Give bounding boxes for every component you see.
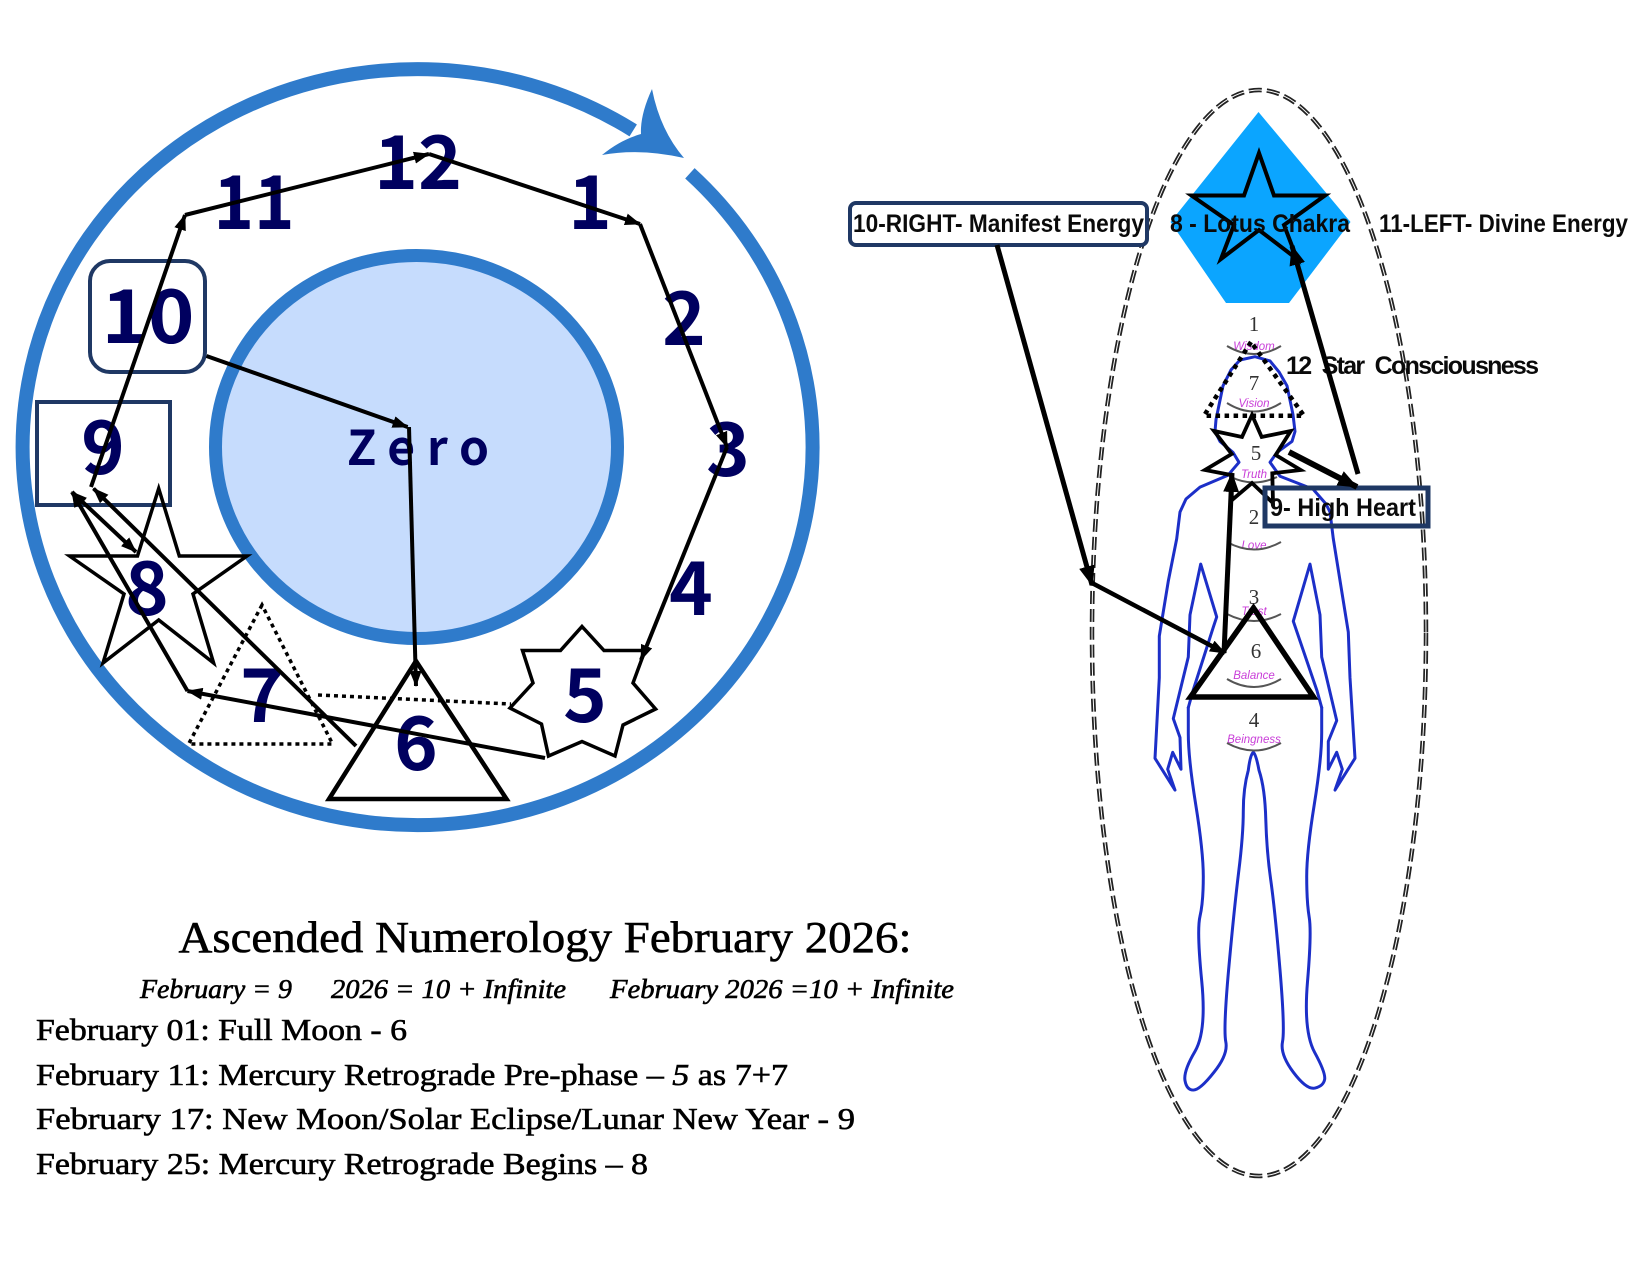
triangle: balance <box>1190 608 1314 697</box>
panel: human body chakra diagram <box>850 90 1628 1176</box>
outer ring arrowhead <box>602 89 684 158</box>
chakra 5: truth: 5 <box>1251 441 1261 465</box>
label box: 9 High Heart: 9- High Heart <box>1270 494 1417 522</box>
chakra 1: wisdom: 1 <box>1249 312 1259 336</box>
dashed aura ellipse <box>1092 90 1426 1176</box>
label: 8 Lotus Chakra: 8 - Lotus Chakra <box>1170 210 1351 238</box>
chakra 1: wisdom <box>1227 312 1281 354</box>
body outline <box>1155 357 1355 1090</box>
date line: February 11: February 11: Mercury Retrograde Pre-phase – 5 as 7+7 <box>36 1057 788 1092</box>
arrows: number path <box>72 154 727 758</box>
label box: 10-RIGHT Manifest Energy <box>850 203 1147 245</box>
rounded box around 10 <box>90 261 205 372</box>
inner circle: zero <box>216 256 618 638</box>
date line: February 25: February 25: Mercury Retrograde Begins – 8 <box>36 1146 648 1181</box>
arrows: energy flow <box>997 245 1358 653</box>
date line: February 17: February 17: New Moon/Solar Eclipse/Lunar New Year - 9 <box>36 1101 855 1136</box>
label: 11-LEFT Divine Energy: 11-LEFT- Divine Energy <box>1379 210 1628 238</box>
chakra 4: beingness <box>1227 708 1281 750</box>
five-point star around 8 <box>70 488 247 663</box>
outer ring <box>23 69 813 825</box>
number 12: 12 <box>374 104 462 211</box>
number 5: 5 <box>563 637 607 744</box>
label box: 10-RIGHT Manifest Energy: 10-RIGHT- Manifest Energy <box>853 210 1144 238</box>
number 6: 6 <box>394 685 438 792</box>
chakra 3: trust <box>1227 585 1281 621</box>
number 7: 7 <box>240 637 284 744</box>
chakra 7: vision: 7 <box>1249 371 1259 395</box>
subtitle equations: February 2026 =10 + Infinite <box>609 974 954 1004</box>
chakra 4: beingness: 4 <box>1249 708 1260 732</box>
subtitle equations: February = 9 <box>139 974 293 1004</box>
chakra 4: beingness: Beingness <box>1227 734 1281 746</box>
subtitle equations: 2026 = 10 + Infinite <box>331 974 566 1004</box>
chakra 2: love <box>1227 505 1281 552</box>
chakra 1: wisdom: Wisdom <box>1233 341 1275 353</box>
chakra 3: trust: Trust <box>1241 606 1267 618</box>
square around 9 <box>37 402 170 505</box>
chakra 6: balance <box>1227 639 1281 687</box>
number 4: 4 <box>669 530 713 637</box>
chakra 6: balance: Balance <box>1233 670 1275 682</box>
chakra 7: vision: Vision <box>1238 398 1270 410</box>
panel: numerology cycle wheel <box>23 69 813 825</box>
number 11: 11 <box>214 144 294 251</box>
subtitle equations <box>139 974 954 1004</box>
number 2: 2 <box>662 260 706 367</box>
number 10: 10 <box>102 258 194 365</box>
number 8: 8 <box>125 530 169 637</box>
chakra 5: truth <box>1231 441 1277 482</box>
panel: numerology dates text <box>36 913 954 1181</box>
date line: February 01: February 01: Full Moon - 6 <box>36 1012 407 1047</box>
number 9: 9 <box>81 389 125 496</box>
chakra 3: trust: 3 <box>1249 585 1259 609</box>
chakra 5: truth: Truth <box>1241 469 1267 481</box>
lotus chakra blue diamond <box>1170 112 1350 303</box>
seven-point star: throat <box>1205 415 1301 503</box>
label: 12 Star Consciousness: 12 Star Consciousness <box>1286 352 1539 380</box>
number 3: 3 <box>706 391 750 498</box>
dotted connector 7 to 5 <box>318 695 511 704</box>
dotted triangle: star consciousness <box>1204 342 1304 416</box>
triangle around 6 <box>329 661 506 799</box>
star on lotus chakra <box>1192 153 1325 259</box>
dotted triangle around 7 <box>189 605 333 744</box>
seven-point star around 5 <box>510 626 656 756</box>
number 1: 1 <box>568 144 612 251</box>
chakra 7: vision <box>1227 371 1281 412</box>
chakra 6: balance: 6 <box>1251 639 1261 663</box>
chakra 2: love: Love <box>1242 540 1266 552</box>
label: Zero: Zero <box>347 409 489 479</box>
title: Ascended Numerology February 2026: <box>178 913 911 962</box>
chakra 2: love: 2 <box>1249 505 1259 529</box>
